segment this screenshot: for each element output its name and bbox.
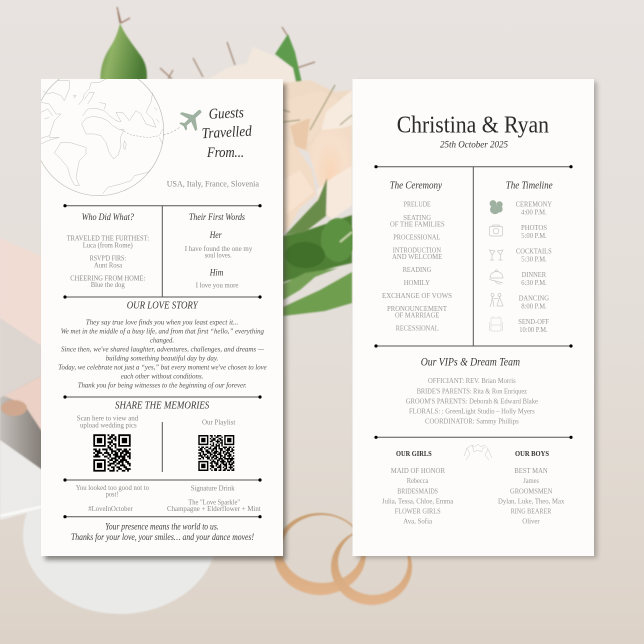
section: share the memories: upload wedding pics xyxy=(80,422,137,430)
divider rule 1 xyxy=(63,204,262,297)
QR code: wedding pics xyxy=(93,435,131,471)
section: the ceremony: OF THE FAMILIES xyxy=(390,220,445,228)
section: our girls: OUR GIRLS xyxy=(396,450,432,458)
section: the ceremony: RECESSIONAL xyxy=(396,325,439,333)
section: share the memories: SHARE THE MEMORIES xyxy=(115,401,209,412)
section: the ceremony: HOMILY xyxy=(404,279,430,287)
divider rule top xyxy=(374,165,573,346)
section: their first words: Him xyxy=(209,269,223,279)
section: our love story: We met in the middle of a busy life, and from that first “hello,” everything xyxy=(61,326,264,335)
section: vips and dream team: COORDINATOR: Sammy Phillips xyxy=(425,418,519,426)
heading: guests travelled from xyxy=(201,105,253,161)
section: the ceremony: PROCESSIONAL xyxy=(393,233,440,241)
divider rule lower xyxy=(374,436,573,439)
bucket xyxy=(0,440,217,614)
divider rule 5 xyxy=(63,515,262,518)
dashed flight path xyxy=(163,127,180,135)
section: our girls: BRIDESMAIDS xyxy=(397,487,438,495)
roses xyxy=(207,34,352,234)
section: the timeline: DINNER xyxy=(522,271,546,279)
section: our love story: changed. xyxy=(150,335,174,344)
section: the timeline: 4:00 P.M. xyxy=(521,208,547,216)
heading: guests travelled from: Guests xyxy=(208,105,244,123)
section: who did what: Blue the dog xyxy=(91,281,125,289)
section: their first words: I have found the one my xyxy=(185,245,253,253)
section: our girls: MAID OF HONOR xyxy=(391,467,445,475)
section: our boys: RING BEARER xyxy=(511,508,552,516)
section: share the memories: Our Playlist xyxy=(202,418,235,426)
section: who did what: CHEERING FROM HOME: xyxy=(70,274,145,282)
section: our love story: building something beautiful day by day. xyxy=(106,353,218,362)
panel: left card xyxy=(34,66,283,556)
section: our boys: Oliver xyxy=(522,518,540,526)
section: the timeline: 8:00 P.M. xyxy=(521,302,547,310)
section: our girls xyxy=(382,450,454,526)
icon: pinky promise hands xyxy=(464,444,492,460)
section: the ceremony: EXCHANGE OF VOWS xyxy=(382,292,452,300)
section: the ceremony: OF MARRIAGE xyxy=(395,311,439,319)
section: the timeline: 6:30 P.M. xyxy=(521,279,547,287)
section: the timeline: DANCING xyxy=(519,295,549,303)
illustration: globe xyxy=(41,79,164,196)
wedding rings xyxy=(274,513,412,605)
section: the timeline: 5:00 P.M. xyxy=(521,232,547,240)
closing thanks: Your presence means the world to us. xyxy=(105,522,219,532)
section: vips and dream team: FLORALS: : GreenLight Studio – Holly Myers xyxy=(409,408,535,416)
section: their first words xyxy=(185,213,253,290)
card shadows xyxy=(45,82,597,560)
closing thanks: Thanks for your love, your smiles… and your dance moves! xyxy=(71,532,254,542)
section: our love story: Since then, we've shared laughter, adventures, challenges, and dreams — xyxy=(61,344,264,353)
ribbon xyxy=(0,238,45,472)
text: hashtag note: You looked too good not to xyxy=(76,484,149,492)
icon: camera xyxy=(490,225,502,236)
section: the timeline: PHOTOS xyxy=(521,224,547,232)
section: who did what: TRAVELED THE FURTHEST: xyxy=(67,235,149,243)
section: vips and dream team xyxy=(406,357,538,426)
icon: dancing couple xyxy=(490,294,503,307)
section: our girls: Ava, Sofia xyxy=(403,518,433,526)
rose bud xyxy=(100,7,147,85)
panel: right card xyxy=(352,79,594,556)
heading: guests travelled from: From... xyxy=(206,145,244,161)
section: our boys: BEST MAN xyxy=(514,467,548,475)
heading: guests travelled from: Travelled xyxy=(201,124,253,142)
section: share the memories: Scan here to view and xyxy=(77,415,139,423)
section: the timeline: CEREMONY xyxy=(516,201,552,209)
section: the timeline xyxy=(490,181,553,334)
icon: couple embracing xyxy=(490,200,503,214)
section: who did what: Luca (from Rome) xyxy=(83,241,133,249)
closing thanks xyxy=(71,522,254,542)
section: our love story: each other without conditions. xyxy=(121,371,203,380)
icon: dinner cloche xyxy=(490,270,503,284)
section: the timeline: 5:30 P.M. xyxy=(521,255,547,263)
section: our girls: FLOWER GIRLS xyxy=(395,508,441,516)
section: the ceremony: AND WELCOME xyxy=(392,253,442,261)
section: our love story: Today, we celebrate not just a “yes,” but every moment we've chosen to love xyxy=(58,362,267,371)
text: signature drink: Champagne + Elderflower + Mint xyxy=(167,505,261,513)
section: their first words: Their First Words xyxy=(189,213,245,223)
divider rule 4 xyxy=(63,478,262,482)
text: hashtag note: #LoveInOctober xyxy=(88,505,133,513)
text: hashtag note xyxy=(76,484,149,513)
divider rule middle xyxy=(374,344,573,348)
section: our love story xyxy=(58,301,267,389)
section: the ceremony: SEATING xyxy=(403,214,431,222)
section: our boys: Dylan, Luke, Theo, Max xyxy=(498,497,565,505)
text: countries: USA, Italy, France, Slovenia xyxy=(167,179,259,189)
leaves xyxy=(283,178,355,316)
section: their first words: Her xyxy=(209,231,222,241)
section: who did what: Who Did What? xyxy=(82,213,134,223)
section: our love story: They say true love finds you when you least expect it... xyxy=(86,317,238,326)
section: our love story: OUR LOVE STORY xyxy=(127,301,199,312)
section: share the memories xyxy=(77,401,235,472)
text: signature drink: The "Love Sparkle" xyxy=(188,499,240,507)
section: vips and dream team: Our VIPs & Dream Team xyxy=(421,357,520,369)
section: the ceremony xyxy=(382,181,452,333)
section: who did what: RSVP'D FIRS: xyxy=(90,255,126,263)
icon: airplane xyxy=(175,102,209,136)
section: the timeline: COCKTAILS xyxy=(516,247,552,255)
section: vips and dream team: GROOM'S PARENTS: Deborah & Edward Blake xyxy=(406,398,538,406)
divider rule 2 xyxy=(63,295,262,299)
section: vips and dream team: BRIDE'S PARENTS: Rita & Ron Enriquez xyxy=(417,387,527,395)
section: their first words: I love you more xyxy=(196,282,238,290)
section: the ceremony: PRONOUNCEMENT xyxy=(387,305,448,313)
date: 25th October 2025 xyxy=(440,141,508,151)
section: the ceremony: INTRODUCTION xyxy=(393,246,441,254)
section: our boys: OUR BOYS xyxy=(515,450,549,458)
section: vips and dream team: OFFICIANT: REV. Brian Morris xyxy=(428,377,516,385)
section: their first words: soul loves. xyxy=(205,251,232,259)
text: hashtag note: post! xyxy=(106,491,118,499)
icon: cocktail glasses xyxy=(490,250,503,260)
title: couple names: Christina & Ryan xyxy=(397,112,549,138)
sprigs xyxy=(160,27,315,79)
section: our girls: Julia, Tessa, Chloe, Emma xyxy=(382,497,454,505)
section: our boys xyxy=(498,450,565,526)
divider rule 3 xyxy=(63,395,262,399)
section: the timeline: SEND-OFF xyxy=(518,318,549,326)
section: the ceremony: READING xyxy=(403,266,431,274)
section: the timeline: 10:00 P.M. xyxy=(519,326,548,334)
section: the timeline: The Timeline xyxy=(506,181,553,192)
section: our boys: James xyxy=(523,477,539,485)
section: the ceremony: The Ceremony xyxy=(390,181,442,192)
text: signature drink: Signature Drink xyxy=(191,484,235,492)
section: the ceremony: PRELUDE xyxy=(404,201,431,209)
QR code: playlist xyxy=(198,436,234,470)
icon: decorated car xyxy=(490,316,502,331)
section: who did what: Aunt Rosa xyxy=(94,261,123,269)
section: our boys: GROOMSMEN xyxy=(510,487,552,495)
section: our girls: Rebecca xyxy=(407,477,429,485)
section: our love story: Thank you for being witnesses to the beginning of our forever. xyxy=(78,380,247,389)
text: signature drink xyxy=(167,484,261,513)
section: who did what xyxy=(67,213,149,289)
